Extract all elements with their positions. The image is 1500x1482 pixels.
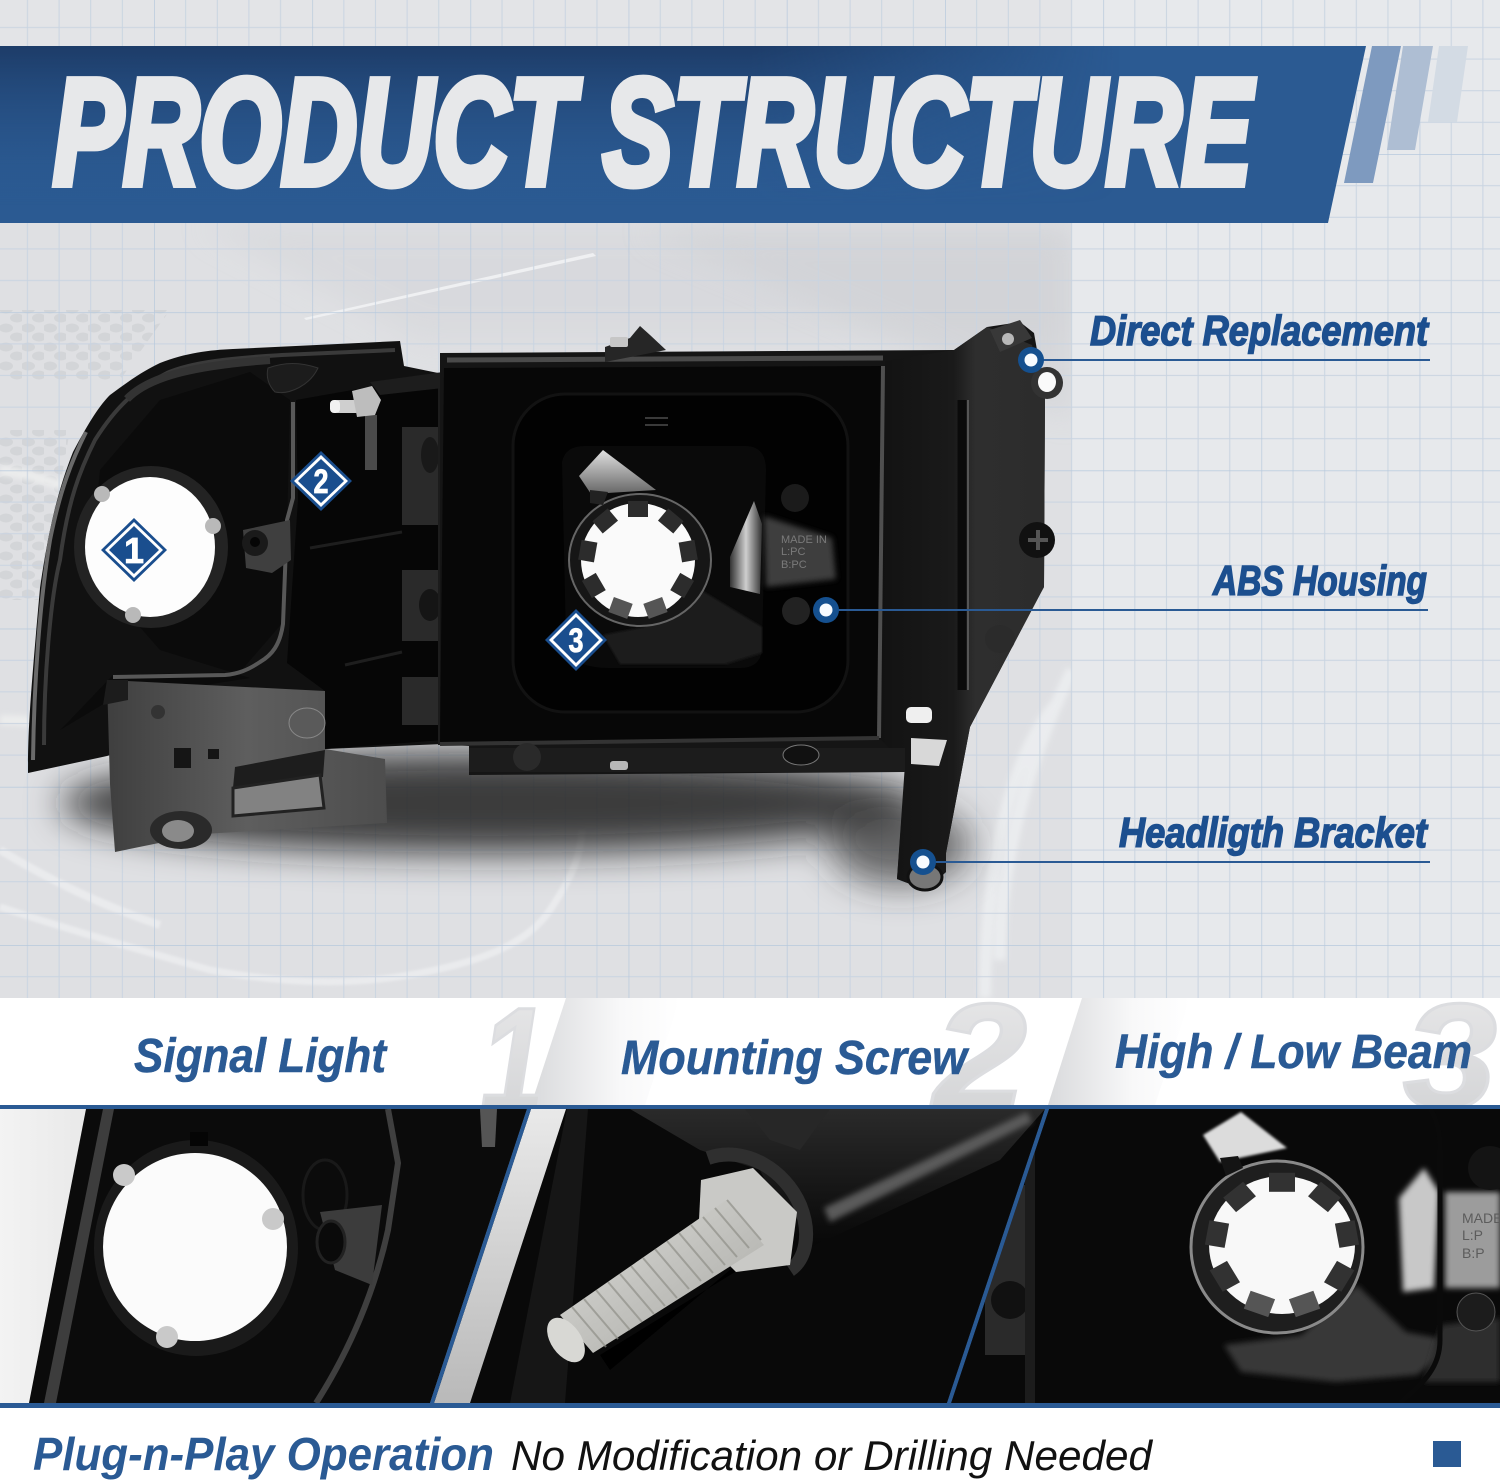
- hex nut: [699, 1168, 797, 1272]
- title banner: [0, 46, 1468, 223]
- label: High / Low Beam: High / Low Beam: [1115, 1026, 1472, 1079]
- signal light socket: [74, 466, 228, 628]
- callout: Direct Replacement: [1018, 307, 1430, 373]
- bolt shadow: [600, 1268, 735, 1370]
- label: Signal Light: Signal Light: [134, 1030, 388, 1083]
- lower bracket: [103, 680, 387, 852]
- callout: Direct Replacement: Direct Replacement: [1090, 307, 1430, 354]
- socket teeth: [1205, 1173, 1359, 1317]
- embossed lens marking: MADE IN: [781, 534, 827, 546]
- photo strip background: [0, 1105, 1500, 1408]
- background with blueprint grid: [0, 0, 1500, 998]
- callout: ABS Housing: [813, 557, 1428, 623]
- large ghost numerals: 1: [480, 976, 546, 1144]
- high / low beam reflector: B:PC: [781, 559, 807, 571]
- footer square marker: [1433, 1441, 1461, 1467]
- socket ring: [1191, 1161, 1363, 1333]
- feature title band: [0, 998, 1500, 1105]
- photo: high / low beam close-up: L:P: [1462, 1227, 1483, 1243]
- bulb socket teeth: [578, 501, 698, 619]
- mounting screw on lamp: [330, 372, 443, 470]
- photo: high / low beam close-up: [945, 1109, 1500, 1403]
- marker diamond 1: [101, 518, 167, 582]
- callout: Headligth Bracket: Headligth Bracket: [1119, 809, 1429, 856]
- high / low beam reflector: [513, 394, 848, 712]
- large ghost numerals: [482, 1002, 1497, 1105]
- label: Mounting Screw: Mounting Screw: [621, 1032, 969, 1085]
- threaded shaft: [560, 1218, 764, 1353]
- callout: Headligth Bracket: [910, 809, 1430, 875]
- high / low beam reflector: L:PC: [781, 546, 806, 558]
- footer: No Modification or Drilling Needed: No Modification or Drilling Needed: [511, 1432, 1154, 1479]
- footer band: [0, 1408, 1500, 1482]
- photo: high / low beam close-up: B:P: [1462, 1245, 1485, 1261]
- large ghost numerals: 3: [1403, 972, 1497, 1140]
- photo: signal light close-up: [0, 1109, 530, 1403]
- headlight assembly photo: [28, 320, 1063, 890]
- marker diamond 3: 3: [568, 622, 584, 660]
- mounting rib columns: [310, 375, 446, 745]
- marker diamond 3: [545, 609, 607, 671]
- main housing: [440, 320, 1063, 890]
- marker diamond 2: [290, 451, 352, 511]
- large ghost numerals: 2: [930, 972, 1027, 1140]
- marker diamond 1: 1: [124, 530, 144, 571]
- callout: ABS Housing: ABS Housing: [1212, 557, 1427, 604]
- photo: mounting screw close-up: [430, 1109, 1050, 1403]
- signal lens housing: [28, 341, 443, 773]
- photo divider lines: [430, 1109, 531, 1403]
- decorative banner stripes: [1344, 46, 1468, 183]
- footer: Plug-n-Play Operation: Plug-n-Play Operation: [33, 1428, 494, 1480]
- product shadow: [60, 753, 970, 885]
- screw boss: [242, 520, 291, 573]
- marker diamond 2: 2: [314, 463, 328, 501]
